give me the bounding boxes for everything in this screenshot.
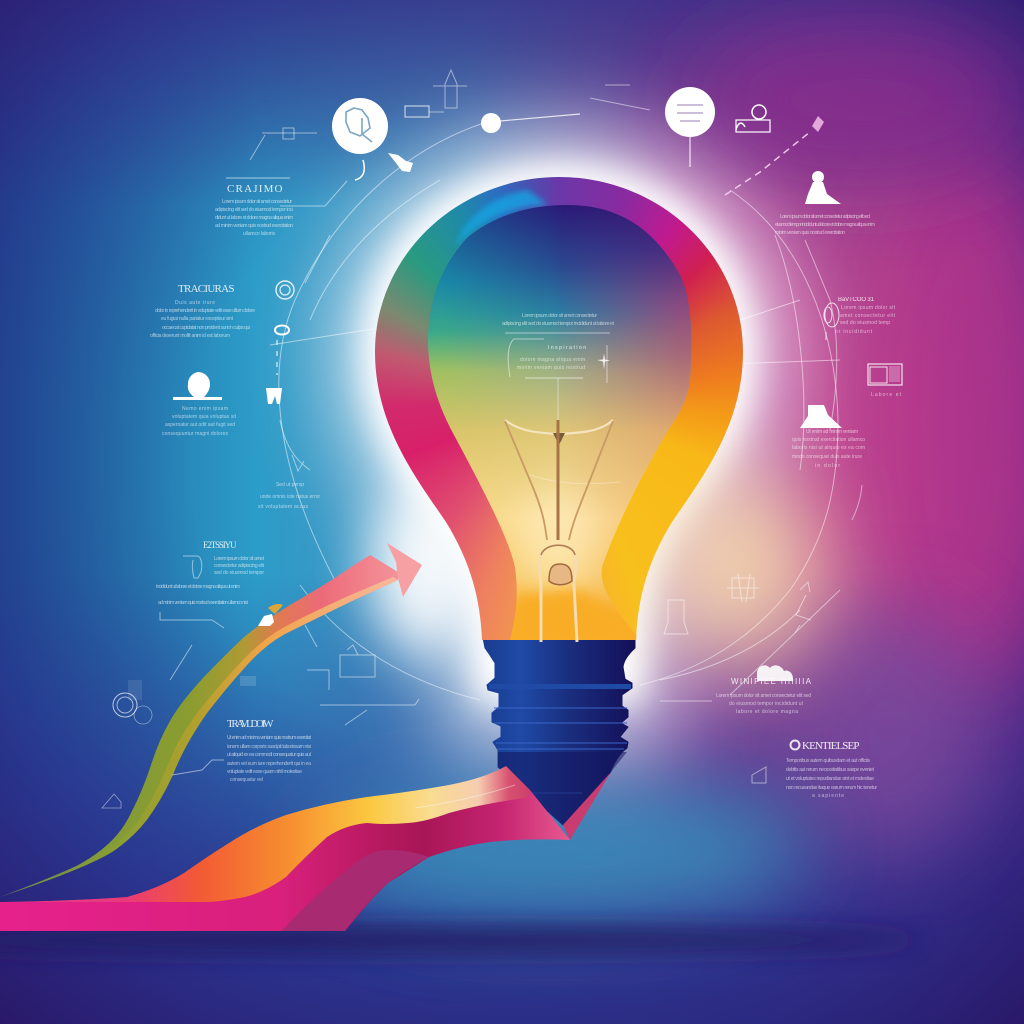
text block: upper left: CRAJIMO <box>227 183 283 195</box>
text block inside bulb: minim veniam quis nostrud <box>517 365 585 371</box>
magnifier sketch and note, right: BaVTCOO 31 <box>838 297 875 303</box>
text block: inner lower left <box>258 420 320 510</box>
globe icon and text: Nemo enim ipsam <box>182 406 228 412</box>
bulb highlight <box>530 475 620 484</box>
globe icon and text <box>162 372 237 437</box>
notes panel: left: ad minim veniam quis nostrud exercitation ullamco nisi <box>158 600 248 606</box>
text block lower right cluster: Lorem ipsum dolor sit amet consectetur elit sed <box>716 693 811 699</box>
bottom ribbon <box>0 766 611 931</box>
small figure on arrow <box>258 604 283 626</box>
bulb interior colours <box>428 205 692 640</box>
text block: inner lower left: sit voluptatem accus <box>258 504 308 510</box>
text block: lower left: TRAVLDO IW <box>227 718 274 730</box>
text block lower right cluster: do eiusmod tempor incididunt ut <box>729 701 804 707</box>
rim cyan highlight <box>455 190 548 248</box>
bell icon and text, right <box>792 405 865 520</box>
text block: middle left: officia deserunt mollit anim id est laborum <box>150 333 230 339</box>
magnifier sketch and note, right: or incididunt <box>835 329 873 335</box>
bell icon and text, right: Ut enim ad minim veniam <box>806 429 858 435</box>
text block inside bulb: Lorem ipsum dolor sit amet consectetur <box>522 313 597 319</box>
text block: upper right: eiusmod tempor incididunt ut labore et dolore magna aliqua enim <box>775 222 875 228</box>
text block: lower left: autem vel eum iure reprehenderit qui in ea <box>227 761 311 767</box>
text block: lower left: consequatur vel <box>230 777 263 783</box>
ribbon magenta layer <box>0 775 570 931</box>
text block: middle left: occaecat cupidatat non proident sunt in culpa qui <box>162 325 250 331</box>
notes panel: left: incididunt ut labore et dolore magna aliqua ut enim <box>156 584 240 590</box>
text block: upper left <box>215 178 293 237</box>
top left circle icon <box>332 98 413 180</box>
text block: middle left: Duis aute irure <box>175 300 215 306</box>
notes panel: left: consectetur adipiscing elit <box>214 563 265 569</box>
bulb glass <box>375 177 743 640</box>
text block: middle left: TRACIURAS <box>178 283 235 295</box>
text block bottom right: Temporibus autem quibusdam et aut officiis <box>786 758 870 764</box>
bell icon and text, right: modo consequat duis aute irure <box>792 454 862 460</box>
globe icon and text: consequuntur magni dolores <box>162 431 228 437</box>
text block: lower left: Ut enim ad minima veniam quis nostrum exercitat <box>227 735 312 741</box>
text block: inner lower left: Sed ut persp <box>276 482 304 488</box>
magnifier sketch and note, right <box>805 240 896 430</box>
bulb rim colours <box>375 177 743 640</box>
text block: lower left: voluptate velit esse quam nihil molestiae <box>227 769 302 775</box>
notes panel: left <box>156 540 265 680</box>
text block inside bulb: Inspiration <box>548 345 586 351</box>
lamp base <box>483 638 635 825</box>
circular connector arcs <box>270 118 840 700</box>
picture icon, right: Labore et <box>871 392 902 398</box>
text block: upper right: Lorem ipsum dolor sit amet consectetur adipiscing elit sed <box>780 214 870 220</box>
small ring icons <box>266 281 294 404</box>
arrow head <box>387 543 422 597</box>
text block inside bulb <box>502 313 615 383</box>
text block bottom right: a sapiente <box>812 793 844 799</box>
text block inside bulb: dolore magna aliqua enim <box>520 357 585 363</box>
magnifier sketch and note, right: sed do eiusmod temp <box>840 320 890 326</box>
notes panel: left: sed do eiusmod tempor <box>214 570 264 576</box>
text block: middle left <box>150 283 255 339</box>
ribbon dark fold <box>282 850 429 931</box>
text block bottom right: non recusandae itaque earum rerum hic tenetur <box>786 785 877 791</box>
rising arrow <box>0 543 422 897</box>
text block lower right cluster <box>660 665 812 715</box>
text block: middle left: dolor in reprehenderit in voluptate velit esse cillum dolore <box>155 308 255 314</box>
ribbon orange band <box>0 766 530 902</box>
text block: upper right: minim veniam quis nostrud exercitation <box>775 230 845 236</box>
text block: lower left: ionem ullam corporis suscipit laboriosam nisi <box>227 744 311 750</box>
bell icon and text, right: in dolor <box>815 463 840 469</box>
ribbon right wing <box>563 772 611 840</box>
text block: inner lower left: unde omnis iste natus error <box>260 494 320 500</box>
top right circle icon <box>665 87 770 167</box>
globe icon and text: voluptatem quia voluptas sit <box>172 414 237 420</box>
text block bottom right: ut et voluptates repudiandae sint et molestiae <box>786 776 874 782</box>
text block: middle left: eu fugiat nulla pariatur excepteur sint <box>161 316 234 322</box>
bell icon and text, right: quis nostrud exercitation ullamco <box>792 437 865 443</box>
globe icon and text: aspernatur aut odit aut fugit sed <box>165 422 235 428</box>
text block lower right cluster: labore et dolore magna <box>736 709 798 715</box>
text block bottom right: KENTIELSEP <box>802 740 860 752</box>
notes panel: left: Lorem ipsum dolor sit amet <box>214 556 265 562</box>
text block: upper left: Lorem ipsum dolor sit amet consectetur <box>222 199 292 205</box>
text block lower right cluster: WINIFIEE IIIIIIIA <box>731 677 812 686</box>
text block bottom right <box>752 740 877 799</box>
bell icon and text, right: laboris nisi ut aliquip ex ea com <box>792 445 865 451</box>
circle sketch icon lower left <box>102 680 152 808</box>
text block: lower left <box>172 718 312 783</box>
glow behind bulb <box>370 177 825 710</box>
text block: lower left: ut aliquid ex ea commodi consequatur quis aut <box>227 752 312 758</box>
text block: upper left: adipiscing elit sed do eiusmod tempor inci <box>215 207 293 213</box>
text block inside bulb: adipiscing elit sed do eiusmod tempor incididunt ut labore et <box>502 321 615 327</box>
text block: upper right <box>775 214 875 236</box>
text block bottom right: debitis aut rerum necessitatibus saepe eveniet <box>786 767 875 773</box>
sketch box: lower middle left <box>240 625 419 725</box>
notes panel: left: E2TSSIYU <box>203 540 237 550</box>
top small icons <box>405 70 650 133</box>
picture icon, right <box>868 364 902 398</box>
sketch icons lower right <box>660 574 811 680</box>
text block: upper left: ad minim veniam quis nostrud exercitation <box>215 223 293 229</box>
kite dashed line <box>725 116 824 195</box>
magnifier sketch and note, right: amet consectetur elit <box>840 313 896 319</box>
text block: upper left: didunt ut labore et dolore magna aliqua enim <box>215 215 293 221</box>
text block: upper left: ullamco laboris <box>243 231 276 237</box>
magnifier sketch and note, right: Lorem ipsum dolor sit <box>841 305 896 311</box>
filament <box>505 378 613 642</box>
person icon <box>805 171 841 204</box>
connector: upper left <box>250 128 347 283</box>
